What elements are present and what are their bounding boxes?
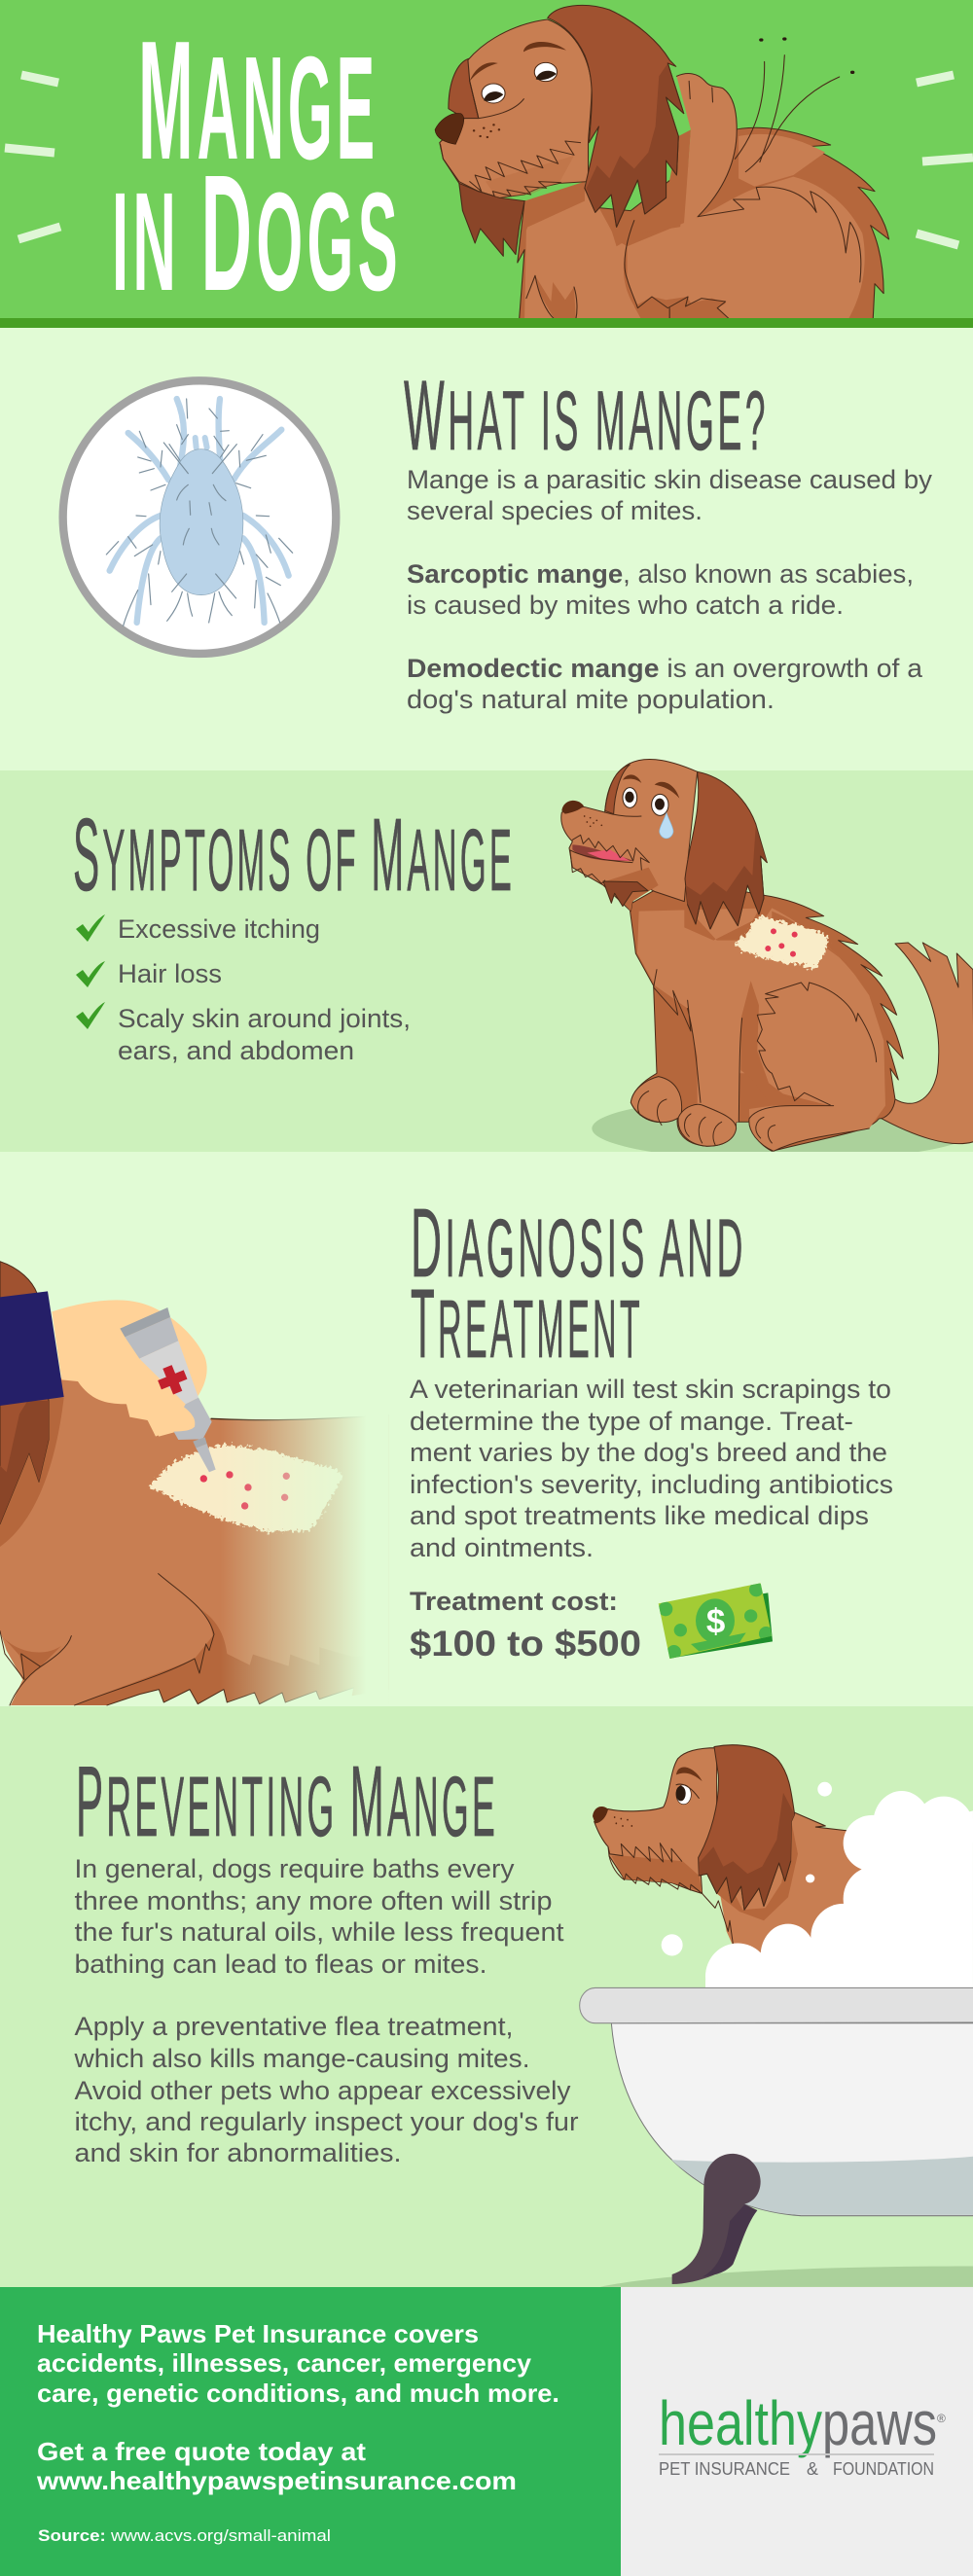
list: symptoms: Excessive itching (118, 914, 320, 944)
illustration: scratching dog (435, 5, 889, 319)
header banner (0, 0, 973, 328)
icon: veterinarian hand (52, 1300, 207, 1437)
text: coverage: Healthy Paws Pet Insurance covers (37, 2319, 479, 2348)
text: prevention advice: Avoid other pets who appear excessively (74, 2076, 571, 2105)
text: diagnosis description: A veterinarian will test skin scrapings to (410, 1375, 891, 1404)
list: symptoms (76, 914, 411, 1065)
illustration: dog in bathtub (580, 1745, 973, 2287)
icon: money bill (659, 1583, 774, 1660)
logo: healthy paws (659, 2388, 946, 2479)
text: coverage: accidents, illnesses, cancer, emergency (37, 2348, 532, 2378)
text: get a quote: www.healthypawspetinsurance.com (36, 2466, 517, 2495)
list: symptoms: Hair loss (118, 959, 222, 988)
text: source: Source: www.acvs.org/small-animal (38, 2526, 331, 2545)
text: diagnosis description (410, 1375, 893, 1562)
text: diagnosis description: and spot treatments like medical dips (410, 1501, 869, 1530)
panel: call to action (0, 2287, 621, 2576)
text: diagnosis description: and ointments. (410, 1533, 594, 1562)
title (112, 5, 402, 326)
text: diagnosis description: infection's severity, including antibiotics (410, 1470, 893, 1499)
icon: tear drop (660, 813, 673, 839)
panel: symptoms of mange (0, 759, 973, 1161)
list: symptoms: Scaly skin around joints, (118, 1004, 411, 1033)
icon: check (76, 961, 105, 987)
icon: bare skin patch with sores (149, 1445, 343, 1532)
text: treatment cost: $100 to $500 (410, 1624, 641, 1664)
text: prevention advice (73, 1854, 579, 2167)
text: mange definition: several species of mites. (407, 496, 703, 525)
heading: diagnosis and treatment (411, 1189, 746, 1378)
logo: healthy paws: paws (822, 2388, 937, 2458)
text: coverage: care, genetic conditions, and much more. (37, 2379, 559, 2408)
text: get a quote: Get a free quote today at (37, 2437, 366, 2466)
text: mange definition (407, 465, 933, 714)
text: prevention advice: the fur's natural oils, while less frequent (74, 1917, 564, 1947)
panel: what is mange (0, 328, 973, 770)
icon: mite in circle (63, 380, 336, 654)
panel: logo (621, 2287, 973, 2576)
text: diagnosis description: determine the type of mange. Treat- (410, 1407, 853, 1436)
icon: itch motion rays (5, 75, 973, 245)
text: mange definition: Sarcoptic mange , also known as scabies, (407, 559, 914, 589)
heading: diagnosis and treatment: TREATMENT (411, 1270, 643, 1378)
heading: preventing mange: PREVENTING MANGE (76, 1745, 498, 1857)
text: prevention advice: In general, dogs require baths every (74, 1854, 515, 1883)
list: symptoms: ears, and abdomen (118, 1036, 354, 1065)
text: prevention advice: itchy, and regularly inspect your dog's fur (74, 2107, 579, 2136)
text: mange definition: Demodectic mange is an overgrowth of a (407, 654, 922, 683)
text: mange definition: Mange is a parasitic skin disease caused by (407, 465, 933, 494)
text: diagnosis description: ment varies by the dog's breed and the (410, 1438, 887, 1467)
text: treatment cost: Treatment cost: (410, 1587, 618, 1616)
title: IN DOGS (112, 141, 402, 326)
logo: healthy paws: ® (937, 2412, 946, 2425)
text: prevention advice: Apply a preventative flea treatment, (74, 2012, 514, 2041)
text: mange definition: is caused by mites who catch a ride. (407, 590, 844, 620)
icon: check (76, 914, 105, 942)
icon: soap suds (662, 1782, 973, 2010)
icon: bathtub (580, 1987, 973, 2284)
logo: healthy paws: & (807, 2459, 818, 2479)
icon: ointment tube (120, 1307, 216, 1472)
title: MANGE (138, 5, 378, 195)
text: prevention advice: bathing can lead to fleas or mites. (74, 1950, 486, 1979)
illustration: bare skin patch (735, 916, 829, 970)
icon: money bill: $ (706, 1602, 725, 1640)
logo: healthy paws: FOUNDATION (833, 2459, 934, 2479)
text: prevention advice: three months; any more often will strip (74, 1886, 553, 1915)
heading: symptoms of mange: SYMPTOMS OF MANGE (73, 798, 515, 912)
text: mange definition: dog's natural mite population. (407, 685, 775, 714)
text: get a quote (36, 2437, 517, 2495)
illustration: sitting dog with tear (561, 759, 973, 1161)
logo: healthy paws: PET INSURANCE (659, 2459, 790, 2479)
icon: sleeve (0, 1291, 64, 1406)
text: coverage (37, 2319, 559, 2408)
text: prevention advice: and skin for abnormalities. (74, 2138, 401, 2167)
text: treatment cost (410, 1587, 641, 1664)
logo: healthy paws: healthy (659, 2388, 822, 2458)
icon: check (76, 1002, 105, 1029)
illustration: vet applying ointment (0, 1262, 389, 1707)
panel: diagnosis and treatment (0, 1152, 973, 1707)
text: prevention advice: which also kills mange-causing mites. (73, 2044, 530, 2073)
panel: preventing mange (0, 1706, 973, 2287)
